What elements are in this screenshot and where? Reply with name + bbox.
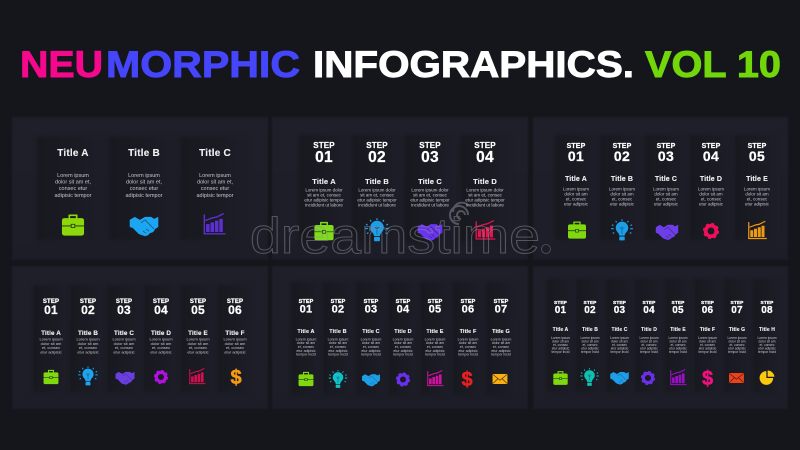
column: step 03: Title C <box>418 177 442 186</box>
column: step 03: dolor sit am <box>362 341 380 345</box>
column: step 02: STEP <box>80 299 96 305</box>
column: step 03: Lorem ipsum <box>361 337 381 341</box>
column: step 06: Lorem ipsum <box>458 337 478 341</box>
column: step 04: etur adipisic <box>699 202 724 206</box>
column: step 05: Lorem ipsum <box>668 336 688 340</box>
column: Title C: dolor sit am et, <box>197 180 234 186</box>
column: step 02: STEP <box>613 143 632 150</box>
column: step 06 <box>218 285 253 392</box>
column: step 06: $ <box>461 369 473 391</box>
column: step 04: 04 <box>703 148 719 164</box>
column: step 01: tempor incid <box>296 352 316 356</box>
column: step 02: dolor sit am <box>78 341 99 346</box>
column: step 01: dolor sit am <box>297 341 315 345</box>
column: step 03: tempor incid <box>611 350 629 354</box>
column: step 04: 04 <box>476 149 494 166</box>
column: Title B: Lorem ipsum <box>128 173 160 179</box>
column: step 04: dolor sit am <box>151 341 172 346</box>
column: step 05: etur adipisic <box>745 202 770 206</box>
column: step 03: Title C <box>655 176 677 183</box>
column: step 05: Title E <box>426 329 444 335</box>
column: step 03: et, consec <box>115 345 133 350</box>
column: step 02: dolor sit am <box>610 192 634 196</box>
column: step 08: STEP <box>761 300 774 306</box>
column: step 04: Lorem ipsum <box>393 337 413 341</box>
column: step 07: STEP <box>731 300 744 306</box>
title: VOL 10 <box>645 44 781 85</box>
panel: seven steps <box>272 266 528 409</box>
column: step 02: 02 <box>584 305 596 316</box>
column: step 05: Lorem ipsum <box>186 337 210 342</box>
column: step 03: dolor sit am <box>611 339 628 343</box>
column: step 05: STEP <box>428 299 443 305</box>
column: step 02: Lorem ipsum <box>76 337 100 342</box>
column: step 04: Lorem ipsum <box>698 186 724 192</box>
column: step 02: 02 <box>81 303 95 317</box>
column: step 04: tempor incid <box>393 352 413 356</box>
column: step 05: et, consec <box>189 345 207 350</box>
column: step 07: et, consec <box>493 345 509 349</box>
column: Title C: Lorem ipsum <box>199 173 231 179</box>
column: step 03: tempor incid <box>361 352 381 356</box>
column: step 04: STEP <box>153 299 169 305</box>
column: step 06: Title F <box>700 327 715 333</box>
column: step 04: 04 <box>397 304 410 316</box>
column: step 03: et, consec <box>656 196 677 202</box>
column: step 01 <box>547 279 574 392</box>
column: step 04 <box>460 135 510 242</box>
column: Title B <box>109 137 179 240</box>
column: step 06: etur adipisic <box>458 349 478 353</box>
column: step 04: dolor sit am <box>699 192 723 196</box>
column: step 01: etur adipisic <box>552 346 570 350</box>
column: step 06: 06 <box>228 303 242 317</box>
column: step 07: Lorem ipsum <box>727 336 747 340</box>
column: step 04: Title D <box>394 329 412 335</box>
column: Title A: adipisic tempor <box>54 193 92 199</box>
column: step 02: etur adipisic <box>77 349 99 354</box>
column: step 02: sit am et, consec <box>360 192 395 198</box>
column: step 07: etur adipisic <box>491 349 511 353</box>
column: step 02 <box>352 135 402 242</box>
title: INFOGRAPHICS. <box>313 44 634 85</box>
column: step 04: Title D <box>151 330 171 337</box>
column: step 03: etur adipisic <box>113 349 135 354</box>
column: step 05: Lorem ipsum <box>744 186 770 192</box>
column: step 04: STEP <box>396 299 411 305</box>
column: step 05: tempor incid <box>425 352 445 356</box>
column: step 03: etur adipisic tempor <box>410 198 450 202</box>
column: step 04: Title D <box>700 176 722 183</box>
column: step 02: dolor sit am <box>581 339 599 343</box>
column: step 04: Lorem ipsum <box>149 337 173 342</box>
column: step 08: Lorem ipsum <box>757 336 777 340</box>
column: step 03 <box>606 279 633 392</box>
column: step 01: 01 <box>44 303 58 317</box>
column: step 07: tempor incid <box>728 350 746 354</box>
column: step 08: tempor incid <box>758 350 776 354</box>
column: step 02: etur adipisic <box>581 346 599 350</box>
column: Title C: consec etur <box>201 186 229 192</box>
column: step 05: dolor sit am <box>669 339 687 343</box>
column: step 01: dolor sit am <box>564 192 588 196</box>
column: step 02: Title B <box>78 330 98 337</box>
column: step 07: etur adipisic <box>728 346 746 350</box>
column: step 04: Title D <box>641 327 657 333</box>
column: step 01: STEP <box>43 299 59 305</box>
column: step 01: Lorem ipsum <box>563 186 589 192</box>
column: step 02: Lorem ipsum <box>328 337 348 341</box>
column: step 02: et, consec <box>582 343 598 347</box>
column: step 06: STEP <box>227 299 243 305</box>
panel: eight steps <box>533 266 788 409</box>
column: step 02: Lorem ipsum dolor <box>358 188 396 192</box>
column: step 05: dolor sit am <box>188 341 209 346</box>
column: step 06: etur adipisic <box>224 349 246 354</box>
column: step 01: dolor sit am <box>41 341 62 346</box>
column: step 04: 04 <box>154 303 168 317</box>
column: step 05: 05 <box>672 305 684 316</box>
column: step 02: et, consec <box>612 196 633 202</box>
column: step 04: etur adipisic <box>640 346 658 350</box>
column: Title A: Title A <box>57 148 89 159</box>
column: Title B: Title B <box>128 148 160 159</box>
column: step 06: dolor sit am <box>459 341 477 345</box>
column: step 05: dolor sit am <box>745 192 769 196</box>
title: NEU <box>20 44 103 85</box>
column: step 04: et, consec <box>701 196 722 202</box>
column: step 01 <box>33 285 68 392</box>
column: step 02: tempor incid <box>581 350 599 354</box>
column: step 03: Title C <box>612 327 628 333</box>
column: step 01: Lorem ipsum dolor <box>305 188 343 192</box>
column: Title C: Title C <box>199 148 231 159</box>
column: step 01: 01 <box>315 149 333 166</box>
column: step 01: 01 <box>300 304 312 316</box>
column: step 03: sit am et, consec <box>413 192 448 198</box>
column: step 01: etur adipisic tempor <box>304 198 344 202</box>
column: step 05 <box>735 135 778 240</box>
column: step 05: 05 <box>191 303 205 317</box>
column: Title A: consec etur <box>59 186 87 192</box>
column: step 08: 08 <box>761 305 773 316</box>
column: step 03: etur adipisic <box>361 349 381 353</box>
column: Title A <box>37 137 108 240</box>
column: step 04: incididunt ut labore <box>466 202 504 208</box>
column: step 03 <box>405 135 455 242</box>
column: step 01: tempor incid <box>552 350 570 354</box>
column: step 03: Lorem ipsum <box>610 336 629 340</box>
column: step 01: etur adipisic <box>40 349 62 354</box>
column: step 03: Title C <box>114 330 134 337</box>
column: step 02: Title B <box>611 176 633 183</box>
column: step 01 <box>555 135 598 240</box>
column: step 02 <box>576 279 603 392</box>
panel: three titles <box>12 117 268 260</box>
column: Title C: adipisic tempor <box>196 193 234 199</box>
column: step 01: STEP <box>313 141 335 150</box>
column: step 03: etur adipisic <box>611 346 629 350</box>
column: step 03: STEP <box>364 299 379 305</box>
column: step 02: incididunt ut labore <box>358 202 396 208</box>
panel: five steps <box>533 117 788 260</box>
column: step 04: Title D <box>473 177 497 186</box>
column: step 03: STEP <box>419 141 441 150</box>
column: step 04: etur adipisic <box>393 349 413 353</box>
column: step 06: Title F <box>225 330 245 337</box>
column: step 08: et, consec <box>759 343 775 347</box>
column: step 03: Lorem ipsum <box>112 337 136 342</box>
column: step 02: et, consec <box>79 345 97 350</box>
column: step 02: STEP <box>584 300 597 306</box>
column: step 01: Title A <box>312 177 336 186</box>
column: step 04: et, consec <box>395 345 411 349</box>
column: step 03: et, consec <box>363 345 379 349</box>
column: step 07: et, consec <box>729 343 745 347</box>
column: step 07: tempor incid <box>491 352 511 356</box>
column: step 05 <box>665 279 692 392</box>
column: step 03: 03 <box>658 148 674 164</box>
column: step 02: et, consec <box>330 345 346 349</box>
column: step 05: tempor incid <box>669 350 687 354</box>
column: step 07: 07 <box>495 304 507 316</box>
column: step 02: 02 <box>368 149 386 166</box>
column: step 05: et, consec <box>427 345 443 349</box>
column: step 06 <box>453 282 483 395</box>
column: step 02: 02 <box>332 304 344 316</box>
column: step 04: dolor sit am <box>394 341 412 345</box>
column: step 04: Lorem ipsum dolor <box>466 188 504 192</box>
column: step 05: STEP <box>190 299 206 305</box>
column: Title B: dolor sit am et, <box>126 180 163 186</box>
column: step 05: Title E <box>746 176 768 183</box>
column: Title A: dolor sit am et, <box>55 180 92 186</box>
column: step 02 <box>600 135 643 240</box>
column: step 02: Title B <box>582 327 598 333</box>
column: step 03: 03 <box>421 149 439 166</box>
column: step 01: STEP <box>299 299 314 305</box>
column: step 01: et, consec <box>298 345 314 349</box>
title <box>20 44 781 85</box>
column: step 03: incididunt ut labore <box>411 202 449 208</box>
panel: four steps <box>272 117 528 260</box>
column: step 01: 01 <box>555 305 566 316</box>
column: step 02: etur adipisic tempor <box>357 198 397 202</box>
column: step 04 <box>388 282 418 395</box>
column: step 02: Lorem ipsum <box>609 186 635 192</box>
column: step 02: Title B <box>365 177 389 186</box>
column: step 07: Lorem ipsum <box>491 337 511 341</box>
column: step 01: incididunt ut labore <box>305 202 343 208</box>
column: step 04: Lorem ipsum <box>639 336 659 340</box>
column: step 01: Lorem ipsum <box>296 337 316 341</box>
column: step 06: Lorem ipsum <box>698 336 717 340</box>
column: step 06: $ <box>230 367 242 389</box>
column: step 02: etur adipisic <box>610 202 635 206</box>
column: step 06 <box>694 279 721 392</box>
column: step 02 <box>323 282 353 395</box>
column: step 01 <box>291 282 321 395</box>
column: step 07: STEP <box>494 299 509 305</box>
column: step 04: sit am et, consec <box>468 192 503 198</box>
column: step 06: tempor incid <box>458 352 478 356</box>
column: step 01: et, consec <box>42 345 60 350</box>
column: step 05: dolor sit am <box>426 341 444 345</box>
column: Title C <box>180 137 250 240</box>
column: step 08 <box>753 279 780 392</box>
panel: six steps <box>12 266 268 409</box>
column: step 06: STEP <box>701 300 715 306</box>
column: step 04: 04 <box>643 305 655 316</box>
column: step 01: Lorem ipsum <box>551 336 570 340</box>
column: step 03: etur adipisic <box>654 202 679 206</box>
column: step 06: 06 <box>702 305 713 316</box>
column: step 04: dolor sit am <box>640 339 658 343</box>
column: step 03: dolor sit am <box>114 341 135 346</box>
column: step 01: Title A <box>553 327 569 333</box>
column: Title B: consec etur <box>130 186 158 192</box>
column: step 06: etur adipisic <box>699 346 717 350</box>
column: step 05: etur adipisic <box>669 346 687 350</box>
column: step 03: dolor sit am <box>654 192 678 196</box>
column: step 04: et, consec <box>152 345 170 350</box>
column: step 07: dolor sit am <box>728 339 746 343</box>
column: step 08: Title H <box>759 327 775 333</box>
column: step 01: dolor sit am <box>552 339 569 343</box>
column: step 05: 05 <box>749 148 765 164</box>
column: step 02: Title B <box>329 329 347 335</box>
column: step 05: Lorem ipsum <box>425 337 445 341</box>
column: step 05: Title E <box>188 330 208 337</box>
column: step 07: Title G <box>729 327 745 333</box>
column: step 03: 03 <box>365 304 377 316</box>
column: step 03: STEP <box>657 143 676 150</box>
column: step 03: 03 <box>117 303 131 317</box>
column: step 03: Title C <box>362 329 380 335</box>
column: step 02: tempor incid <box>328 352 348 356</box>
column: step 03: et, consec <box>612 343 627 347</box>
column: step 01 <box>299 135 349 242</box>
column: step 07: dolor sit am <box>492 341 510 345</box>
column: step 05: etur adipisic <box>425 349 445 353</box>
column: step 02: Lorem ipsum <box>580 336 600 340</box>
column: step 05: STEP <box>748 143 767 150</box>
column: step 04: STEP <box>643 300 656 306</box>
column: step 02: STEP <box>366 141 388 150</box>
column: step 01: etur adipisic <box>296 349 316 353</box>
column: step 05: et, consec <box>670 343 686 347</box>
column: step 02 <box>70 285 105 392</box>
column: step 06: dolor sit am <box>225 341 246 346</box>
column: step 06: Lorem ipsum <box>223 337 247 342</box>
column: step 05: Title E <box>670 327 686 333</box>
column: step 04: etur adipisic <box>150 349 172 354</box>
column: step 06: $ <box>702 368 713 390</box>
column: step 01: Title A <box>565 176 587 183</box>
column: step 06: et, consec <box>700 343 715 347</box>
column: Title A: Lorem ipsum <box>57 173 89 179</box>
column: step 04: STEP <box>702 143 721 150</box>
column: step 03 <box>107 285 142 392</box>
column: step 03: STEP <box>613 300 627 306</box>
column: step 06: et, consec <box>460 345 476 349</box>
column: step 01: Title A <box>41 330 61 337</box>
column: step 04: etur adipisic tempor <box>465 198 505 202</box>
column: step 02: dolor sit am <box>329 341 347 345</box>
column: step 04: tempor incid <box>640 350 658 354</box>
column: step 01: Title A <box>297 329 315 335</box>
watermark: dreamstime <box>250 208 540 264</box>
column: step 01: et, consec <box>566 196 587 202</box>
column: step 06: STEP <box>461 299 476 305</box>
column: step 06: dolor sit am <box>699 339 716 343</box>
column: step 03: STEP <box>116 299 132 305</box>
column: Title B: adipisic tempor <box>126 193 163 199</box>
column: step 04 <box>635 279 662 392</box>
column: step 06: tempor incid <box>699 350 717 354</box>
column: step 01: STEP <box>567 143 586 150</box>
column: step 03 <box>356 282 386 395</box>
column: step 06: Title F <box>460 329 477 335</box>
column: step 02: 02 <box>614 148 630 164</box>
column: step 08: dolor sit am <box>758 339 776 343</box>
column: step 01: et, consec <box>553 343 568 347</box>
column: step 03: 03 <box>614 305 625 316</box>
column: step 01: sit am et, consec <box>307 192 342 198</box>
column: step 07 <box>486 282 516 395</box>
column: step 04: STEP <box>474 141 496 150</box>
column: step 05: 05 <box>429 304 441 316</box>
column: step 03 <box>645 135 688 240</box>
column: step 04 <box>144 285 179 392</box>
column: step 07 <box>724 279 751 392</box>
column: step 01: STEP <box>554 300 568 306</box>
column: step 01: 01 <box>568 148 584 164</box>
column: step 07: Title G <box>492 329 510 335</box>
title: MORPHIC <box>106 44 300 85</box>
column: step 04 <box>690 135 733 240</box>
column: step 05 <box>181 285 216 392</box>
column: step 03: Lorem ipsum dolor <box>411 188 449 192</box>
column: step 03: Lorem ipsum <box>653 186 679 192</box>
column: step 06: 06 <box>462 304 474 316</box>
column: step 02: STEP <box>331 299 346 305</box>
column: step 01: etur adipisic <box>564 202 589 206</box>
column: step 06: et, consec <box>226 345 244 350</box>
column: step 01: Lorem ipsum <box>39 337 63 342</box>
column: step 08: etur adipisic <box>758 346 776 350</box>
column: step 05: etur adipisic <box>187 349 209 354</box>
column: step 07: 07 <box>731 305 743 316</box>
column: step 04: et, consec <box>641 343 657 347</box>
column: step 05: et, consec <box>747 196 768 202</box>
column: step 05 <box>420 282 450 395</box>
column: step 02: etur adipisic <box>328 349 348 353</box>
column: step 05: STEP <box>672 300 685 306</box>
